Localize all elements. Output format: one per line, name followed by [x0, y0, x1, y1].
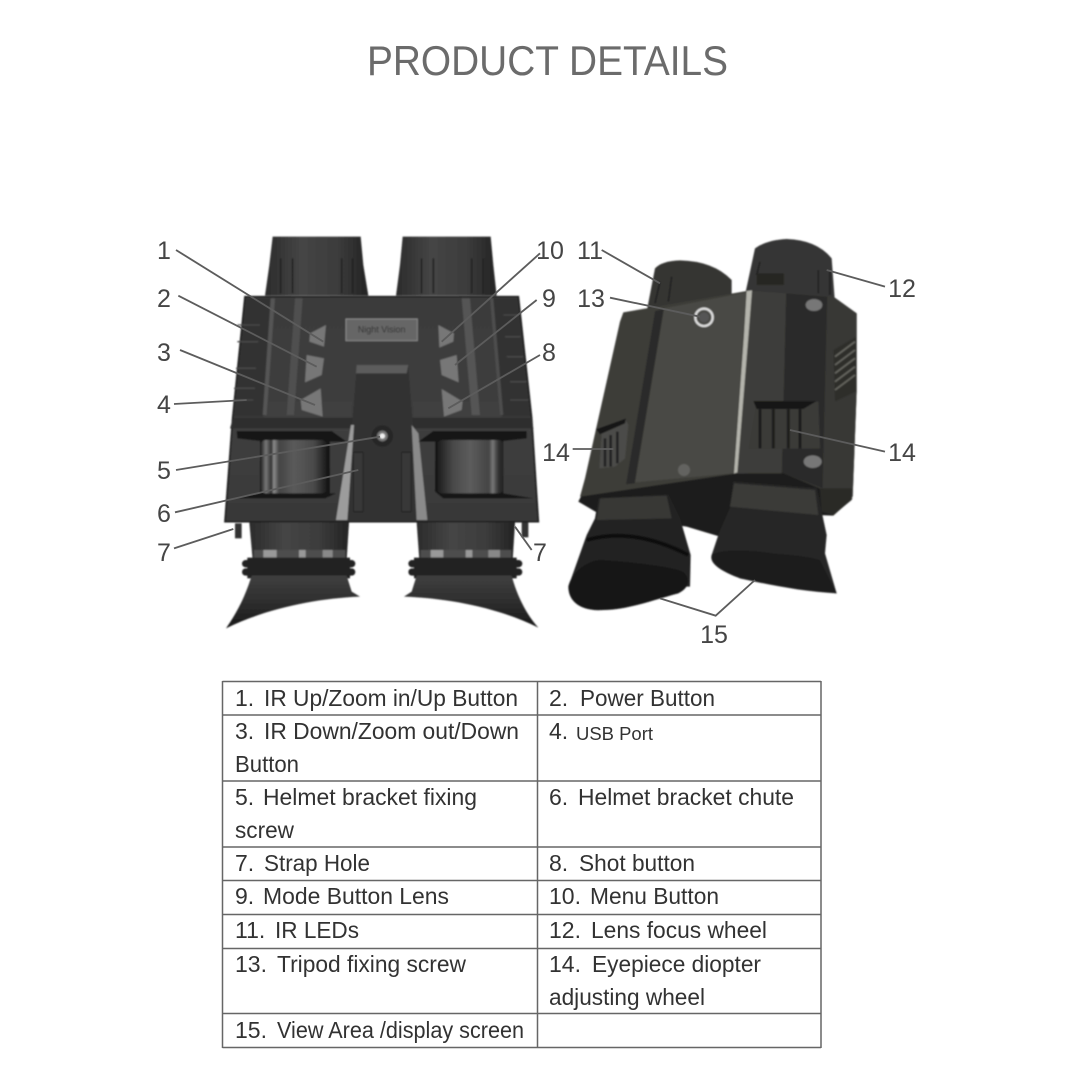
- row 8: 15.: [235, 1017, 267, 1043]
- logo plate: [346, 319, 417, 341]
- callout numbers: 6: [157, 500, 171, 528]
- title: PRODUCT DETAILS: [367, 37, 728, 84]
- dark strip: [626, 309, 664, 484]
- row 5: Menu Button: [590, 883, 719, 909]
- left barrel: [647, 260, 732, 312]
- row 4: 8.: [549, 850, 568, 876]
- row 3: screw: [235, 817, 294, 843]
- table grid: [222, 681, 821, 1048]
- row 7: Eyepiece diopter: [592, 951, 761, 977]
- left eyepiece: [226, 522, 360, 628]
- row 1: IR Up/Zoom in/Up Button: [264, 685, 518, 711]
- row 8: View Area /display screen: [277, 1017, 524, 1043]
- right barrel: [745, 239, 835, 303]
- callout numbers: 3: [157, 339, 171, 367]
- callout numbers: 12: [888, 275, 916, 303]
- row 4: [235, 850, 695, 876]
- center face: [635, 292, 746, 482]
- right diopter wheel: [748, 401, 820, 449]
- row 4: Strap Hole: [264, 850, 370, 876]
- callout numbers: 7: [533, 539, 547, 567]
- illustration: binoculars front view: [225, 237, 538, 628]
- left eyepiece: [568, 494, 691, 610]
- row 3: Helmet bracket fixing: [263, 784, 477, 810]
- row 7: 14.: [549, 951, 581, 977]
- row 3: [235, 784, 794, 843]
- row 4: 7.: [235, 850, 254, 876]
- right diopter wheel: [418, 431, 533, 498]
- light seam: [734, 290, 752, 473]
- center recess and light strips: [336, 365, 427, 520]
- left diopter wheel: [233, 431, 347, 498]
- underside shadow: [578, 472, 853, 537]
- callout numbers: 8: [542, 339, 556, 367]
- row 1: [235, 685, 715, 711]
- callout numbers: 14: [888, 439, 916, 467]
- logo plate: Night Vision: [358, 325, 406, 335]
- right eyepiece: [711, 482, 852, 593]
- leader lines: rear view: [573, 250, 885, 616]
- row 3: 5.: [235, 784, 254, 810]
- row 1: 1.: [235, 685, 254, 711]
- callout numbers: 2: [157, 285, 171, 313]
- icon: tripod screw: [695, 309, 713, 326]
- callout numbers: 1: [157, 237, 171, 265]
- row 7: Tripod fixing screw: [277, 951, 466, 977]
- row 1: 2.: [549, 685, 568, 711]
- leader lines: front view: [174, 250, 540, 550]
- decorative dots: [678, 299, 822, 476]
- callout numbers: 4: [157, 391, 171, 419]
- row 2: 4.: [549, 718, 568, 744]
- row 6: 11.: [235, 917, 265, 943]
- middle face: [737, 291, 786, 473]
- row 7: 13.: [235, 951, 267, 977]
- left objective barrel: [265, 237, 368, 296]
- right objective barrel: [396, 237, 497, 296]
- callout numbers: 10: [536, 237, 564, 265]
- row 6: Lens focus wheel: [591, 917, 767, 943]
- callout numbers: 15: [700, 621, 728, 649]
- legend table: [222, 681, 821, 1048]
- icon: tripod screw: [372, 425, 393, 447]
- row 2: 3.: [235, 718, 254, 744]
- illustration: binoculars angled rear view: [568, 239, 857, 610]
- right side band: [822, 297, 857, 515]
- row 3: Helmet bracket chute: [578, 784, 794, 810]
- row 5: [235, 883, 719, 909]
- row 4: Shot button: [579, 850, 695, 876]
- row 2: Button: [235, 751, 299, 777]
- main housing: [225, 297, 538, 522]
- row 7: [235, 951, 761, 1010]
- callout numbers: 7: [157, 539, 171, 567]
- left diopter wheel: [596, 418, 628, 468]
- row 7: adjusting wheel: [549, 984, 705, 1010]
- row 2: IR Down/Zoom out/Down: [264, 718, 519, 744]
- callout numbers: [157, 237, 916, 649]
- row 1: Power Button: [580, 685, 715, 711]
- right eyepiece: [404, 522, 538, 628]
- callout numbers: 13: [577, 285, 605, 313]
- callout numbers: 5: [157, 457, 171, 485]
- callout numbers: 9: [542, 285, 556, 313]
- callout numbers: 14: [542, 439, 570, 467]
- callout numbers: 11: [577, 237, 603, 265]
- row 3: 6.: [549, 784, 568, 810]
- side vent: [833, 337, 856, 402]
- row 2: USB Port: [576, 724, 653, 744]
- row 6: 12.: [549, 917, 581, 943]
- row 5: 9.: [235, 883, 254, 909]
- dark panel: [782, 293, 827, 488]
- row 2: [235, 718, 653, 777]
- row 5: 10.: [549, 883, 581, 909]
- main housing: [580, 291, 857, 515]
- barrel ridges: [655, 262, 830, 303]
- row 6: IR LEDs: [275, 917, 359, 943]
- strap holes: [235, 522, 528, 538]
- row 6: [235, 917, 767, 943]
- row 5: Mode Button Lens: [263, 883, 449, 909]
- buttons: [301, 325, 463, 417]
